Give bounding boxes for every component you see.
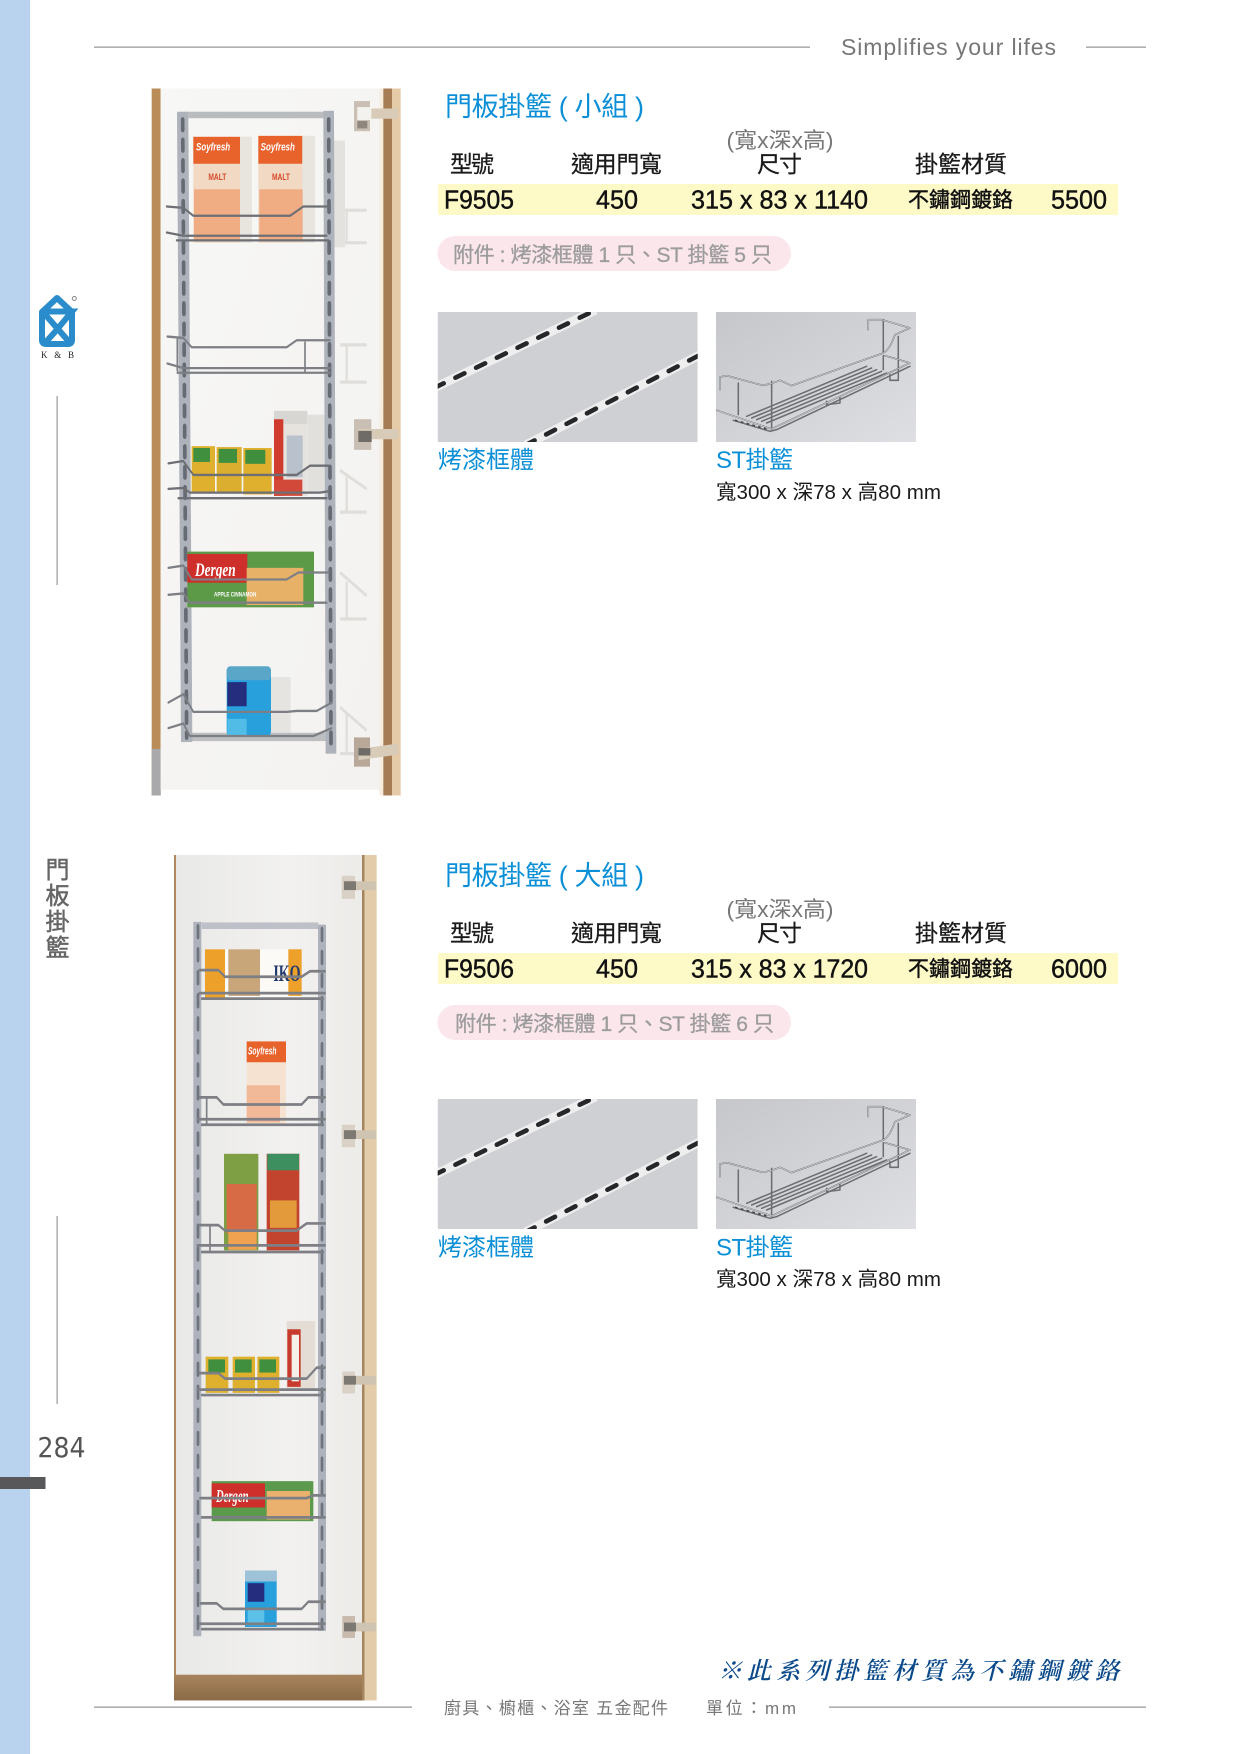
footer line right: [829, 1707, 1146, 1708]
dimension note: (寬x深x高): [726, 897, 834, 922]
caption: ST basket: ST掛籃: [716, 1234, 793, 1262]
photo: large door basket set: IKO: [273, 962, 301, 987]
table row: [444, 954, 1107, 984]
product section: small set: [435, 92, 1118, 504]
table row: 450: [596, 954, 638, 984]
table row: 450: [596, 184, 638, 214]
photo: small door basket set: MALT: [208, 172, 226, 182]
side label: 門板掛籃: 門: [46, 857, 70, 884]
side rule upper: [57, 396, 58, 585]
accessories pill: 附件 : 烤漆框體 1 只、ST 掛籃 5 只: [453, 244, 772, 267]
header slogan: Simplifies your lifes: [841, 34, 1056, 60]
table headers: 掛籃材質: [915, 920, 1007, 946]
photo: large door basket set: [174, 855, 377, 1700]
left side colour band: [0, 0, 30, 1754]
photo: small door basket set: [152, 89, 401, 795]
icon: K&B logo: K & B: [41, 350, 74, 360]
caption: painted frame: 烤漆框體: [438, 447, 534, 474]
side rule lower: [57, 1216, 58, 1404]
table row: 315 x 83 x 1720: [691, 954, 868, 984]
photo: large door basket set: Soyfresh: [248, 1045, 277, 1057]
table headers: [450, 920, 1007, 946]
table row: 不鏽鋼鍍鉻: [908, 958, 1013, 981]
page tab bar: [0, 1477, 46, 1489]
image: ST basket: [716, 1099, 916, 1229]
material note: ※此系列掛籃材質為不鏽鋼鍍鉻: [718, 1658, 1121, 1685]
table row: [444, 184, 1107, 214]
accessories pill: [438, 236, 791, 271]
table row: 不鏽鋼鍍鉻: [908, 189, 1013, 212]
footer category text: 廚具、櫥櫃、浴室 五金配件: [444, 1698, 668, 1718]
table headers: [450, 151, 1007, 177]
side label: 門板掛籃: 板: [46, 883, 70, 910]
header line left: [94, 47, 810, 48]
caption: ST basket: ST掛籃: [716, 447, 793, 474]
section title: 門板掛籃 ( 小組 ): [445, 92, 644, 122]
image: ST basket: [716, 312, 916, 442]
side label: 門板掛籃: [46, 857, 70, 962]
photo: small door basket set: Soyfresh: [196, 142, 230, 154]
table row: 315 x 83 x 1140: [691, 184, 868, 214]
table headers: 型號: [450, 920, 494, 946]
footer line left: [94, 1707, 412, 1708]
footer unit text: 單位：mm: [706, 1699, 796, 1718]
photo: small door basket set: APPLE CINNAMON: [214, 592, 256, 599]
accessories pill: [438, 1005, 791, 1040]
table headers: 尺寸: [757, 920, 802, 946]
photo: large door basket set: Dergen: [215, 1487, 249, 1507]
header line right: [1086, 47, 1146, 48]
photo: small door basket set: MALT: [272, 172, 290, 182]
table headers: 尺寸: [757, 151, 802, 177]
side label: 門板掛籃: 籃: [46, 935, 70, 962]
basket dimensions: 寬300 x 深78 x 高80 mm: [716, 481, 941, 504]
table headers: 型號: [450, 151, 494, 177]
icon: K&B logo: [41, 296, 76, 360]
image: painted frame: [435, 310, 702, 445]
table headers: 適用門寬: [571, 920, 662, 946]
table row: 6000: [1051, 954, 1107, 984]
dimension note: (寬x深x高): [726, 128, 834, 153]
product section: large set: [435, 861, 1118, 1291]
caption: painted frame: 烤漆框體: [438, 1234, 534, 1262]
photo: small door basket set: Dergen: [194, 561, 236, 581]
photo: small door basket set: Soyfresh: [261, 142, 295, 154]
table headers: 掛籃材質: [915, 151, 1007, 177]
table row: F9505: [444, 184, 514, 214]
table row: 5500: [1051, 184, 1107, 214]
spec band: [438, 184, 1118, 215]
table row: F9506: [444, 954, 514, 984]
table headers: 適用門寬: [571, 151, 662, 177]
section title: 門板掛籃 ( 大組 ): [445, 861, 644, 891]
image: painted frame: [435, 1097, 702, 1232]
accessories pill: 附件 : 烤漆框體 1 只、ST 掛籃 6 只: [455, 1013, 774, 1036]
basket dimensions: 寬300 x 深78 x 高80 mm: [716, 1268, 941, 1291]
page number: 284: [38, 1431, 86, 1464]
side label: 門板掛籃: 掛: [46, 909, 70, 936]
spec band: [438, 953, 1118, 984]
